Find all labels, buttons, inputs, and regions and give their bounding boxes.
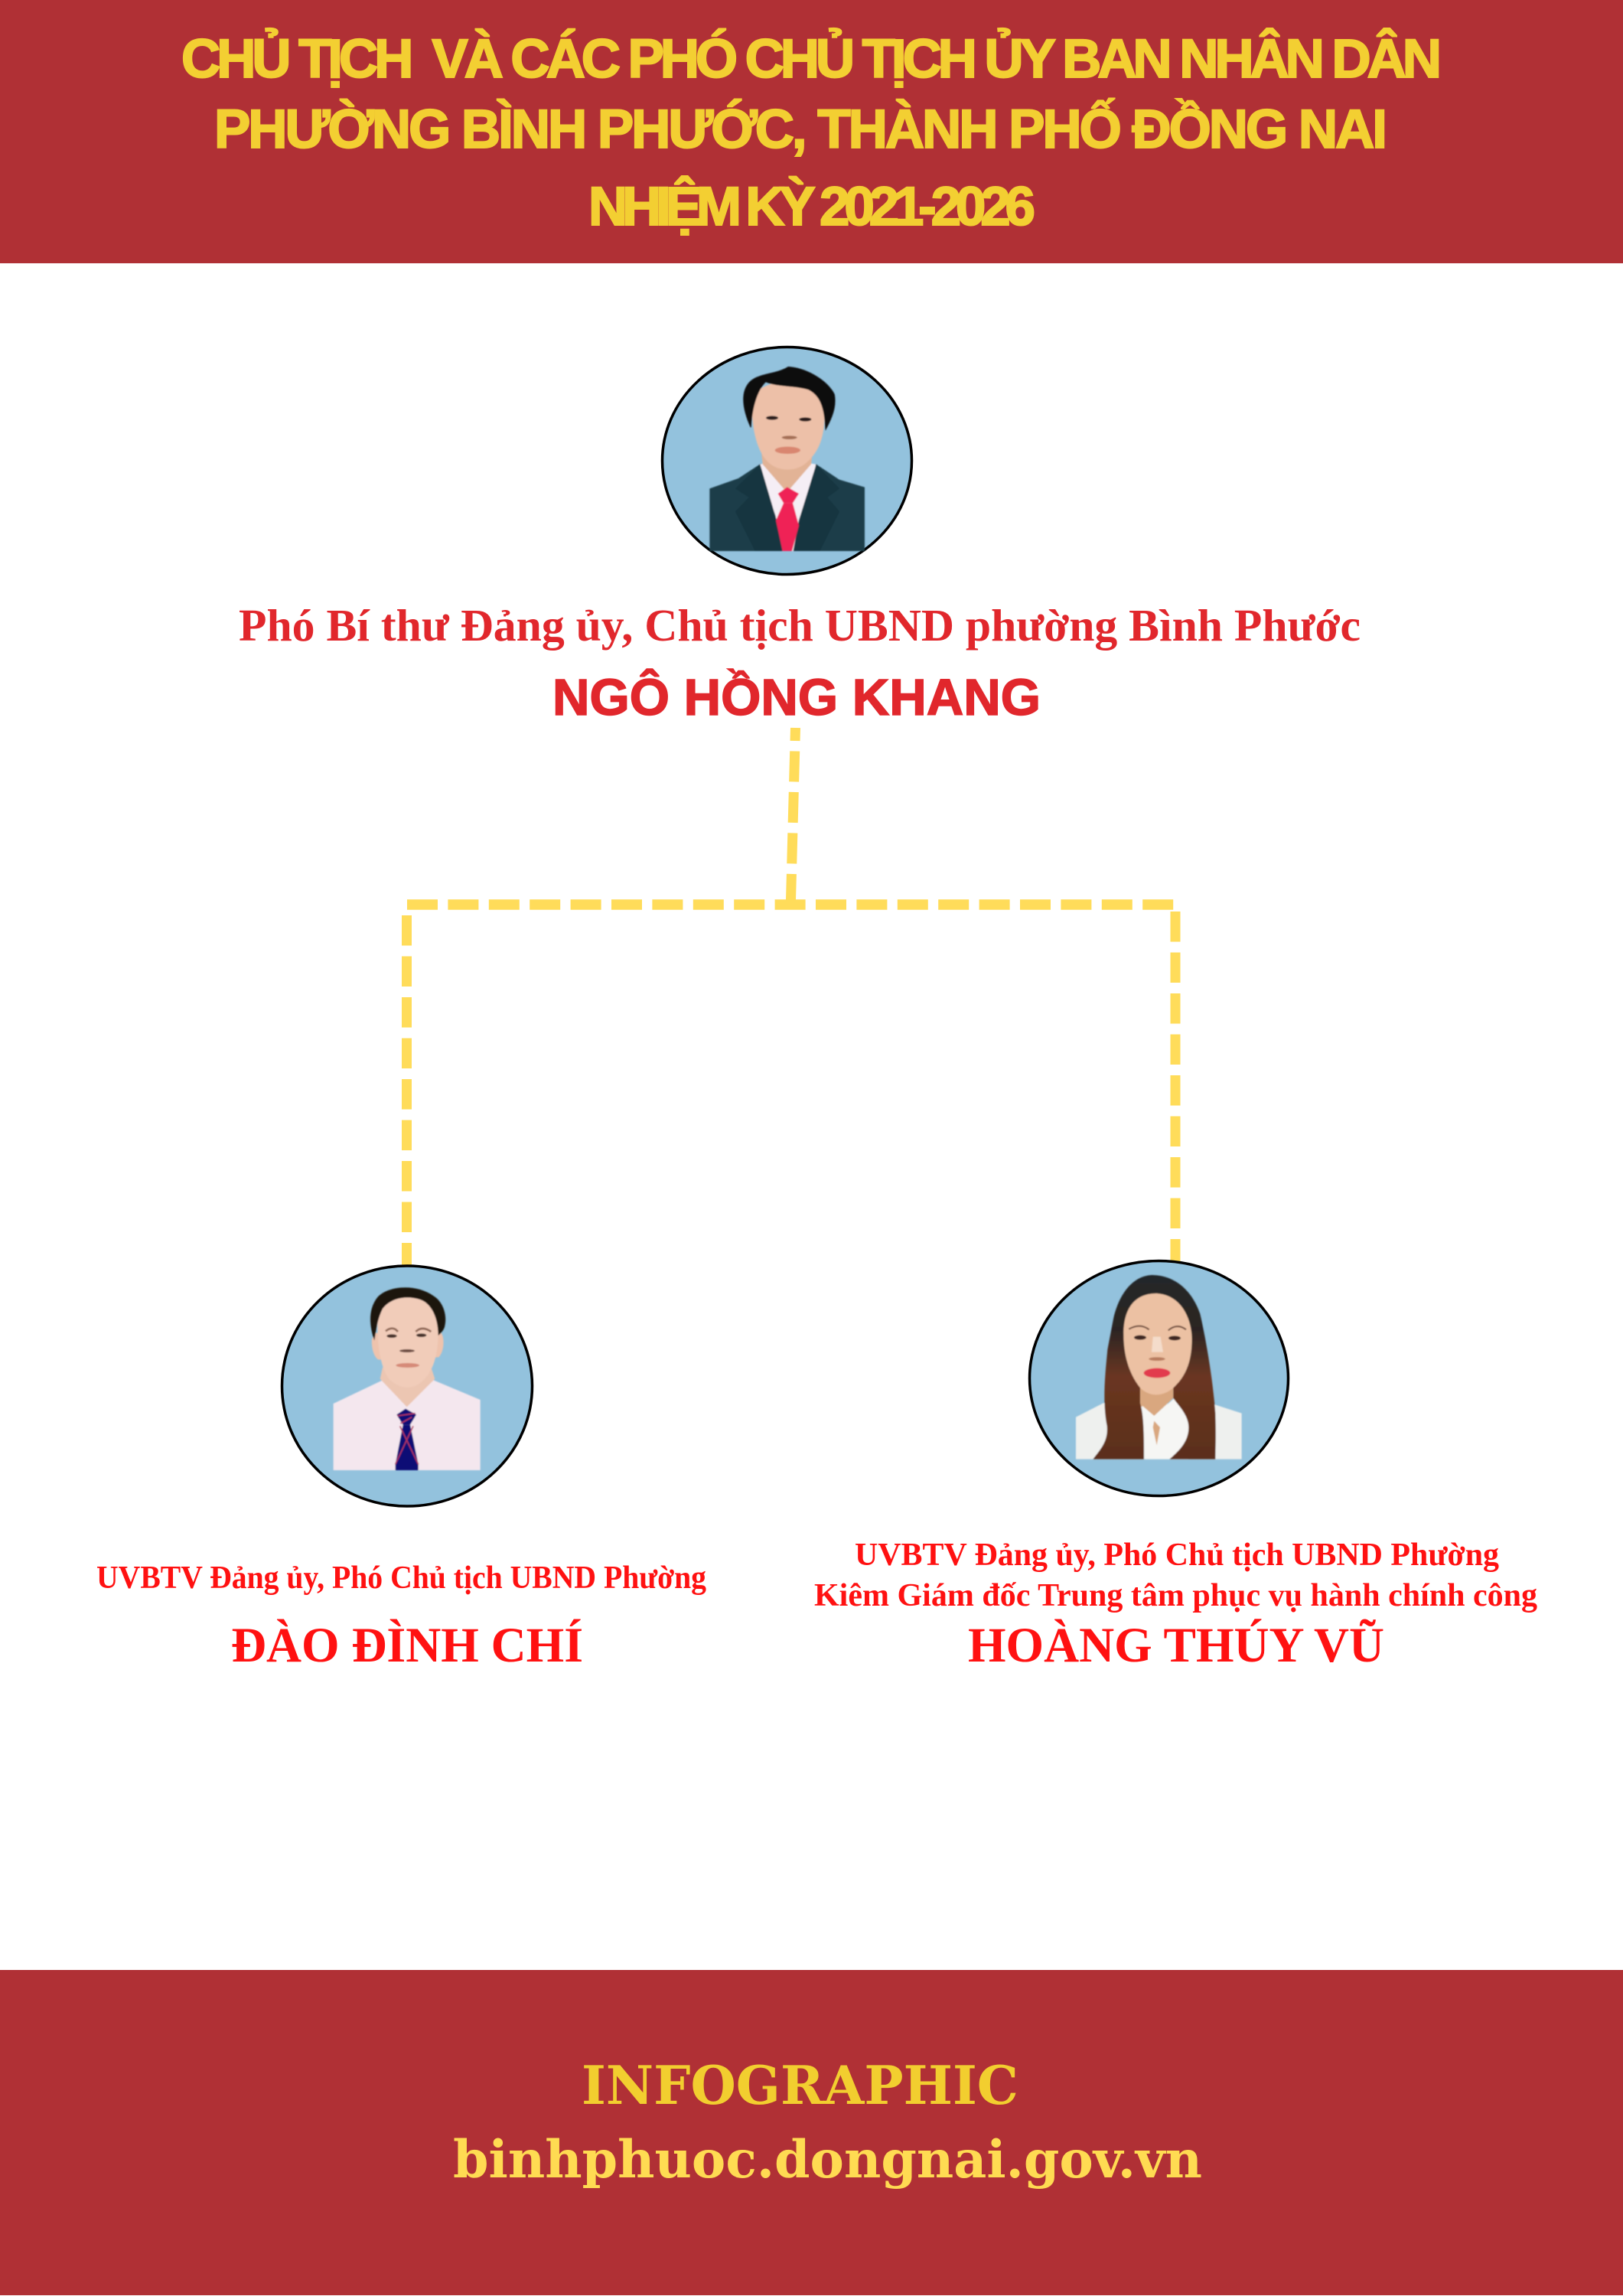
text: vice chair 1 role: UVBTV Đảng ủy, Phó Chủ tịch UBND Phường	[96, 1561, 706, 1596]
title line 1: CHỦ TỊCH VÀ CÁC PHÓ CHỦ TỊCH ỦY BAN NHÂN DÂN	[181, 28, 1442, 90]
portrait: Ngô Hồng Khang	[663, 347, 912, 574]
portrait: Đào Đình Chí	[282, 1266, 533, 1506]
title line 3: NHIỆM KỲ 2021-2026	[588, 176, 1035, 237]
footer website: binhphuoc.dongnai.gov.vn	[453, 2129, 1202, 2190]
dashed connector lines	[407, 728, 1175, 1267]
text: vice chair 2 name: HOÀNG THÚY VŨ	[968, 1618, 1384, 1673]
header band	[0, 0, 1623, 263]
footer label: INFOGRAPHIC	[582, 2055, 1018, 2117]
footer band	[0, 1970, 1623, 2295]
title line 2: PHƯỜNG BÌNH PHƯỚC, THÀNH PHỐ ĐỒNG NAI	[214, 99, 1387, 160]
text: vice chair 2 role line 2: Kiêm Giám đốc Trung tâm phục vụ hành chính công	[814, 1578, 1537, 1613]
text: chairman role: Phó Bí thư Đảng ủy, Chủ tịch UBND phường Bình Phước	[239, 600, 1361, 651]
text: chairman name: NGÔ HỒNG KHANG	[552, 669, 1041, 726]
text: vice chair 1 name: ĐÀO ĐÌNH CHÍ	[231, 1618, 583, 1673]
portrait: Hoàng Thúy Vũ	[1030, 1261, 1289, 1495]
text: vice chair 2 role line 1: UVBTV Đảng ủy, Phó Chủ tịch UBND Phường	[855, 1538, 1499, 1573]
